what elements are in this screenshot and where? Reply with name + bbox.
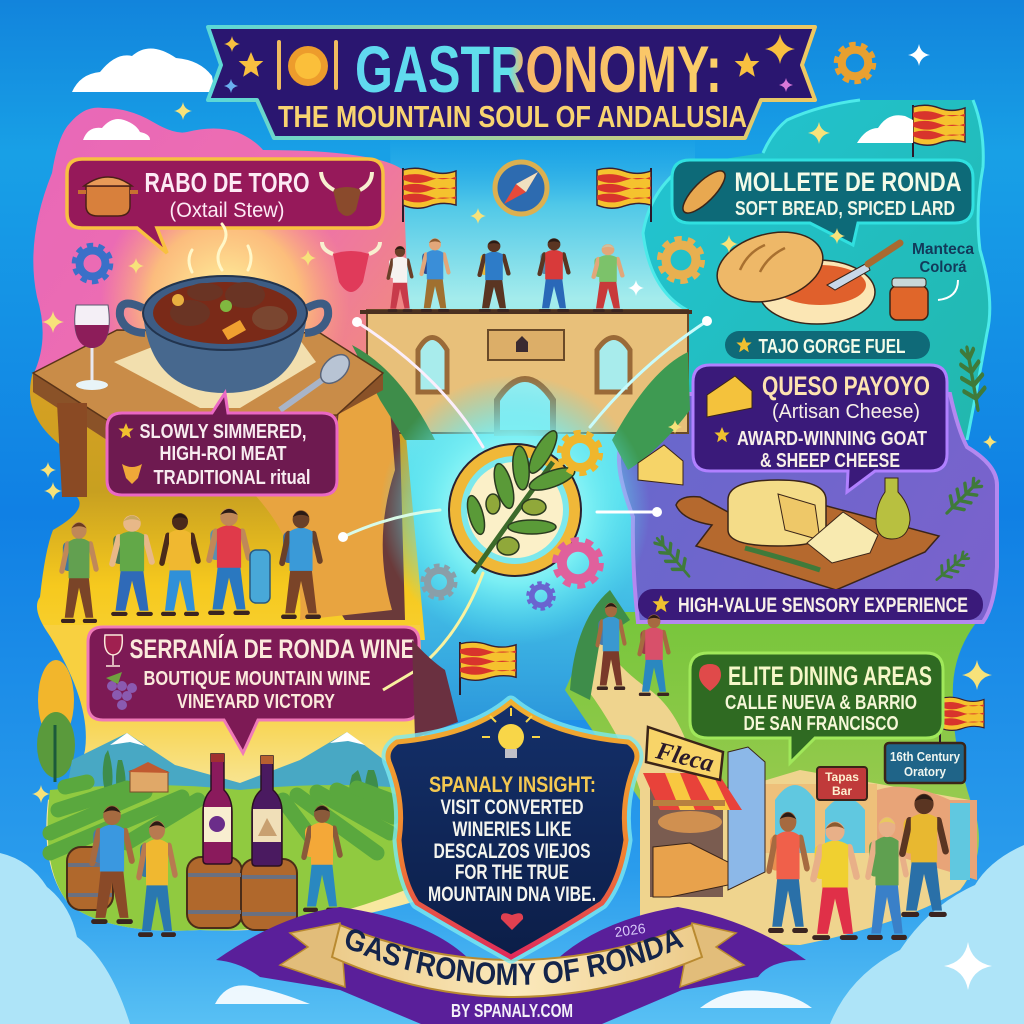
sign: tapas bar: Tapas [825, 770, 859, 784]
region: pink blob [33, 108, 408, 375]
sparkles [32, 102, 997, 803]
barrels [67, 847, 297, 930]
town scene [643, 727, 977, 938]
cheese board illustration [638, 445, 939, 590]
body text [428, 796, 596, 906]
region: teal outline [643, 100, 990, 440]
body text: VISIT CONVERTED [440, 796, 584, 819]
label: manteca colora: Manteca [912, 241, 974, 258]
hikers left [62, 508, 320, 621]
subtitle: THE MOUNTAIN SOUL OF ANDALUSIA [278, 99, 747, 134]
region: yellow sky left-bottom [43, 625, 430, 931]
credit: BY SPANALY.COM [451, 1001, 573, 1021]
wine bottles [203, 754, 282, 866]
small pink-blob cloud [83, 119, 150, 140]
icon: bread [677, 165, 731, 219]
title banner [208, 27, 815, 138]
icon: star [714, 427, 730, 442]
heading: QUESO PAYOYO [762, 371, 930, 401]
footer title: GASTRONOMY OF RONDA [346, 929, 684, 986]
white sparkles [628, 44, 992, 990]
panel: serrania wine [88, 627, 419, 753]
bush and hikers on path [570, 590, 668, 700]
rosemary sprigs [651, 346, 988, 585]
cloud by flag [857, 115, 913, 143]
text line: BOUTIQUE MOUNTAIN WINE [144, 668, 370, 690]
heading: ELITE DINING AREAS [728, 661, 932, 691]
icon: red bull head [322, 242, 380, 292]
sign: fleca [646, 727, 723, 780]
body text: FOR THE TRUE [455, 861, 569, 884]
callout: simmered [107, 393, 337, 495]
icon: bull [321, 172, 372, 216]
icon: grapes [106, 672, 137, 710]
title text: GASTRONOMY: [355, 32, 722, 106]
heading: SERRANÍA DE RONDA WINE [130, 633, 414, 664]
central glow and olive emblem [380, 375, 650, 645]
gears around emblem [423, 433, 600, 609]
text lines: SLOWLY SIMMERED, [140, 421, 306, 443]
icon: plate and cutlery [279, 42, 336, 88]
heading: MOLLETE DE RONDA [734, 167, 962, 197]
glow behind pot [100, 175, 350, 425]
connector lines [338, 316, 712, 690]
panel: mollete de ronda [672, 160, 973, 245]
label: manteca colora: Colorá [920, 259, 967, 276]
body text: WINERIES LIKE [452, 818, 572, 841]
sign: oratory: 16th Century [890, 749, 961, 764]
icon: cheese [707, 376, 752, 417]
sign: oratory: Oratory [904, 764, 947, 779]
dark cliff above shield [412, 640, 458, 738]
people in town [769, 812, 807, 930]
text line: VINEYARD VICTORY [177, 691, 336, 713]
white cloud puffs [215, 985, 812, 1008]
small tree left [37, 660, 75, 782]
text line: CALLE NUEVA & BARRIO [725, 692, 917, 714]
region: yellow blob [30, 372, 425, 640]
people in vineyard [92, 806, 132, 922]
centre sky panel [390, 135, 695, 720]
heading: RABO DE TORO [144, 167, 310, 198]
gears [74, 45, 873, 281]
footer ribbon [216, 907, 806, 1024]
region: green right [565, 612, 985, 945]
connector node on wine panel [383, 665, 425, 690]
insight shield [388, 702, 637, 957]
panel: rabo de toro [67, 159, 383, 253]
text lines: HIGH-ROI MEAT [160, 443, 286, 465]
jar [890, 286, 928, 320]
arrow: manteca to jar [938, 280, 958, 300]
bridge scene [360, 238, 692, 470]
text: SOFT BREAD, SPICED LARD [735, 198, 955, 220]
panel: queso payoyo [693, 365, 947, 492]
sign: tapas bar [817, 767, 867, 800]
sign: tapas bar: Bar [832, 784, 852, 798]
compass icon [495, 162, 547, 214]
subheading: (Artisan Cheese) [772, 401, 920, 423]
text line: AWARD-WINNING GOAT [737, 428, 927, 450]
heading: SPANALY INSIGHT: [429, 772, 596, 797]
tag: tajo gorge fuel: TAJO GORGE FUEL [758, 336, 906, 358]
region: purple blob [619, 394, 997, 622]
sign: fleca: Fleca [652, 737, 716, 778]
stars in banner [224, 34, 795, 93]
vineyard scene [48, 732, 430, 935]
table and pot illustration [33, 224, 383, 497]
subheading: (Oxtail Stew) [170, 199, 284, 222]
text line: & SHEEP CHEESE [760, 450, 900, 472]
icon: heart [501, 913, 523, 930]
text line: DE SAN FRANCISCO [744, 713, 898, 735]
body text: MOUNTAIN DNA VIBE. [428, 883, 596, 906]
text lines [140, 421, 310, 489]
region: town ground [580, 640, 976, 945]
icon: pot [78, 177, 138, 216]
label: manteca colora [912, 241, 974, 276]
year: 2026 [613, 920, 647, 940]
tag: high-value [638, 589, 983, 620]
cliff left [255, 345, 435, 620]
flags [403, 105, 984, 745]
hikers on bridge [388, 238, 622, 311]
region: teal blob [640, 100, 990, 440]
sign: oratory [885, 743, 965, 783]
icon: pin [699, 664, 721, 691]
tag: tajo gorge fuel [725, 331, 930, 359]
body text: DESCALZOS VIEJOS [434, 840, 590, 863]
mollete illustration [709, 221, 928, 324]
icon: wine glass [105, 635, 122, 666]
panel: elite dining [690, 653, 943, 763]
text lines: TRADITIONAL ritual [154, 467, 310, 489]
icon: small bull [122, 464, 142, 484]
icon: light bulb [482, 708, 540, 758]
